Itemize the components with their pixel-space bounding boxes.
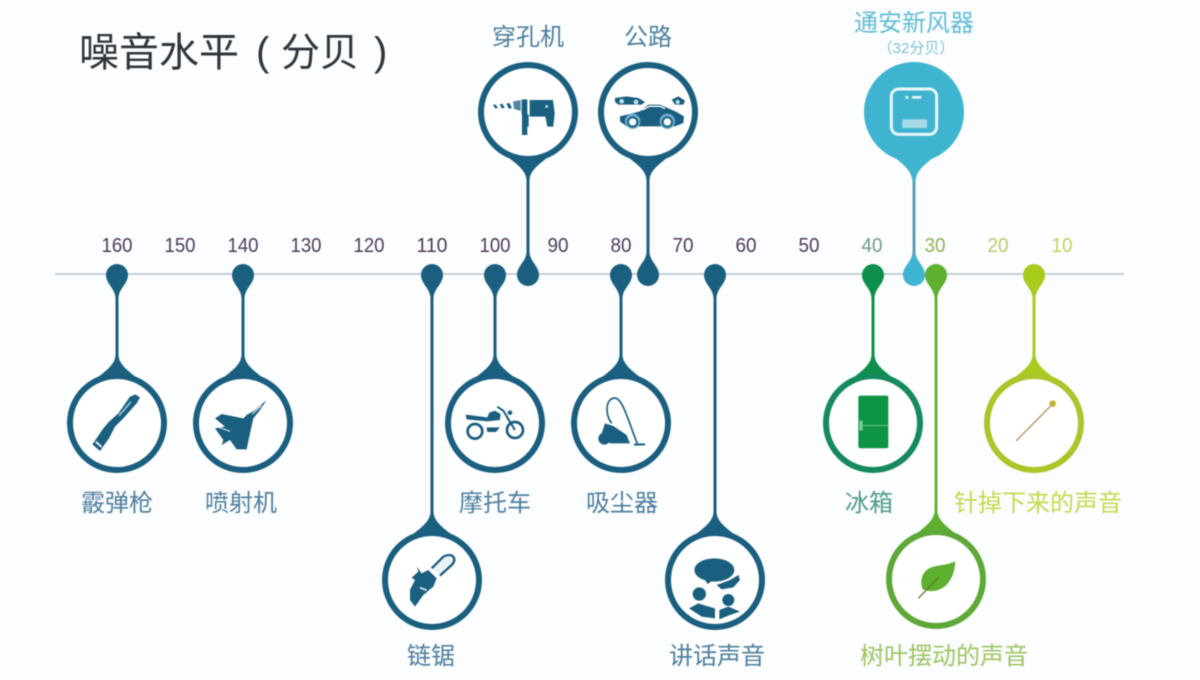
marker: motorcycle 100 dB (448, 264, 542, 470)
marker: jet 140 dB (196, 264, 290, 470)
decibel axis: 130 (290, 235, 322, 257)
decibel axis: 30 (924, 235, 946, 257)
marker: falling pin 10 dB (987, 264, 1081, 470)
label: air purifier: 通安新风器 (854, 10, 974, 37)
icon: refrigerator (858, 396, 888, 448)
icon: shotgun (92, 394, 140, 451)
icon: pin (1016, 400, 1056, 441)
title: ) (374, 30, 387, 74)
icon: cars (615, 96, 685, 129)
decibel axis: 80 (610, 235, 632, 257)
label: jet: 喷射机 (205, 490, 277, 517)
label: drill: 穿孔机 (492, 24, 564, 51)
label: road: 公路 (624, 24, 672, 51)
decibel axis: 20 (988, 235, 1008, 257)
icon: air purifier (891, 89, 937, 134)
title: ( (256, 30, 270, 74)
label: air purifier: （32分贝） (878, 40, 954, 57)
title: 分贝 (281, 32, 359, 75)
decibel axis: 70 (672, 235, 694, 257)
icon: fighter jet (215, 400, 267, 449)
label: leaves: 树叶摆动的声音 (860, 643, 1028, 670)
decibel axis: 60 (736, 235, 756, 257)
icon: chainsaw (410, 555, 454, 607)
decibel axis: 110 (416, 235, 448, 257)
decibel axis: 40 (862, 235, 882, 257)
decibel axis: 100 (480, 235, 510, 257)
decibel axis: 150 (164, 235, 196, 257)
label: air purifier (854, 10, 974, 57)
decibel axis: 90 (548, 235, 568, 257)
icon: vacuum cleaner (598, 398, 645, 446)
title: 噪音水平 (79, 31, 239, 75)
icon: drill (493, 99, 555, 135)
marker: shotgun 160 dB (70, 264, 164, 470)
decibel axis: 140 (228, 235, 258, 257)
marker: drill 90 dB (481, 65, 575, 286)
icon: people talking (689, 558, 740, 619)
marker: road 70s dB (601, 65, 695, 286)
decibel axis: 10 (1052, 235, 1072, 257)
label: refrigerator: 冰箱 (845, 490, 893, 517)
title (79, 30, 387, 75)
decibel axis: 50 (798, 235, 820, 257)
marker: air purifier 32 dB (864, 62, 964, 286)
label: falling pin: 针掉下来的声音 (954, 490, 1122, 517)
marker: leaves 30 dB (889, 264, 983, 626)
marker: chainsaw 110 dB (385, 264, 479, 627)
label: vacuum cleaner: 吸尘器 (586, 490, 658, 517)
icon: motorcycle (466, 407, 523, 439)
decibel axis: 160 (102, 235, 132, 257)
marker: speech 75 dB (668, 264, 762, 627)
marker: refrigerator 40 dB (826, 264, 920, 470)
marker: vacuum cleaner 80 dB (574, 264, 668, 470)
label: motorcycle: 摩托车 (459, 490, 531, 517)
decibel axis: 120 (354, 235, 384, 257)
label: chainsaw: 链锯 (407, 643, 455, 670)
icon: leaf (918, 561, 955, 598)
decibel axis (55, 235, 1124, 274)
label: speech: 讲话声音 (669, 643, 765, 670)
label: shotgun: 霰弹枪 (81, 490, 153, 517)
